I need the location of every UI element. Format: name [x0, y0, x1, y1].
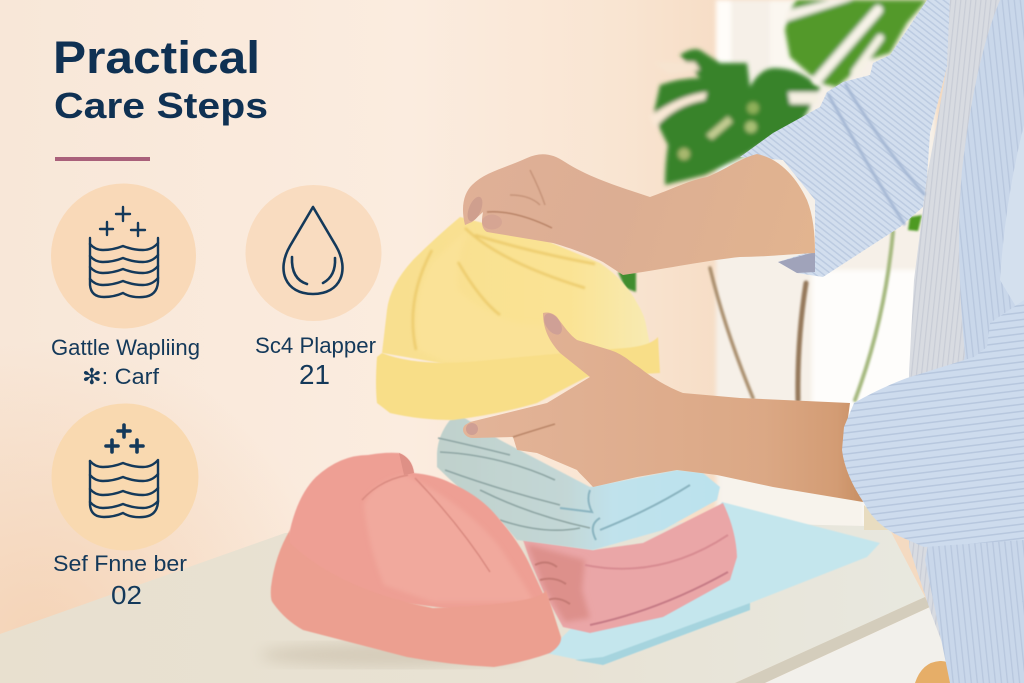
monstera leaf upper [785, 0, 927, 87]
step 2 number: 21 [299, 359, 330, 390]
monstera leaf left [650, 49, 820, 185]
blue grey folded towel [437, 417, 720, 550]
houseplant [618, 0, 927, 400]
pink folded towel [523, 503, 737, 633]
pink hat [271, 453, 561, 667]
plant stems [710, 232, 893, 400]
step 1 circle [51, 184, 196, 328]
table [0, 505, 960, 683]
icon: water drop [283, 207, 343, 294]
title: Practical [53, 32, 260, 83]
blue torso band [925, 0, 1024, 683]
sweater torso and upper sleeve [740, 0, 1024, 683]
lower hand and arm [463, 310, 863, 502]
yellow hat [376, 217, 660, 420]
leaf fragments [618, 215, 922, 292]
step 3 number: 02 [111, 580, 142, 610]
lower sleeve [842, 300, 1024, 547]
pale torso band [1000, 125, 1024, 320]
step 3: sparkling waves [52, 404, 198, 610]
torso [909, 0, 1024, 683]
icon: sparkling water layers [90, 207, 158, 297]
title: Care Steps [54, 85, 268, 126]
flat blue towel [546, 502, 880, 665]
window and backdrop [716, 0, 936, 530]
step 2 circle [246, 185, 382, 321]
upper hand [463, 154, 815, 275]
step 1 sublabel: ✻: Carf [82, 364, 160, 389]
step 2: water drop [246, 185, 382, 390]
icon: sparkling waves [90, 425, 158, 517]
title [53, 32, 268, 126]
step 3 label: Sef Fnne ber [53, 551, 187, 576]
title divider [55, 157, 150, 161]
step 2 label: Sc4 Plapper [255, 333, 376, 358]
step 3 circle [52, 404, 198, 550]
upper sleeve and cuff [740, 0, 950, 277]
step 1 label: Gattle Wapliing [51, 335, 200, 360]
step 1: gentle washing [51, 184, 200, 389]
